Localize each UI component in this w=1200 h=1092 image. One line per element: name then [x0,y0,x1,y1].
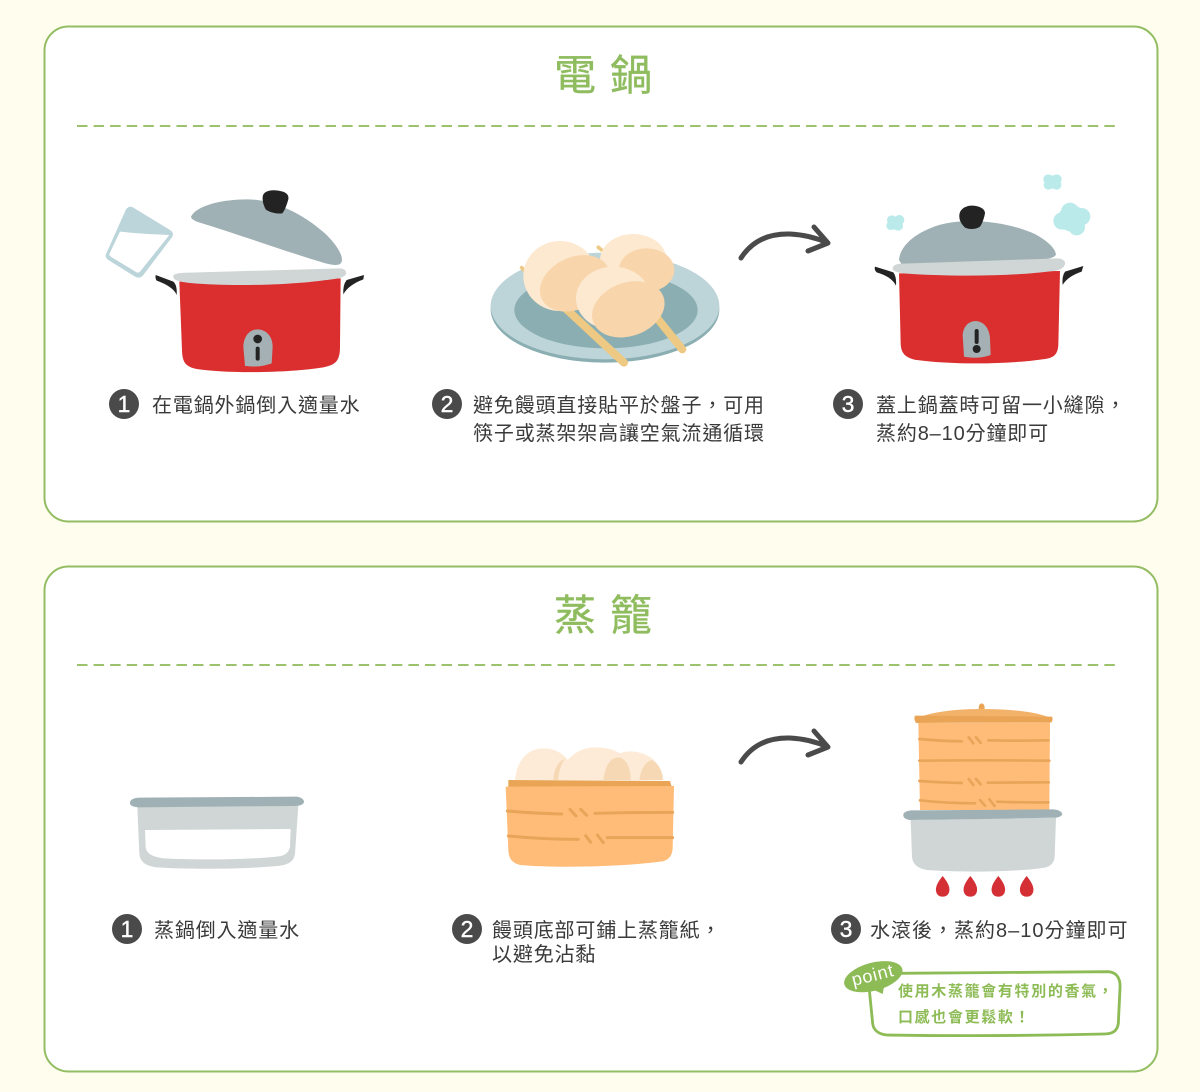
icon: bamboo steamer with buns [506,747,674,867]
step 2 text [432,389,765,445]
panel: 電鍋 [44,26,1158,522]
step 2 text: 以避免沾黏 [492,943,596,966]
step 3 text: 3 [842,391,854,417]
step 2 text: 避免饅頭直接貼平於盤子，可用 [473,394,765,417]
icon: buns on plate with chopsticks [491,234,719,363]
step 3 text [831,914,1128,944]
icon: rice cooker with open lid and water glass [106,190,364,372]
step 3 text [833,389,1126,445]
callout: point: 使用木蒸籠會有特別的香氣， [898,982,1114,1000]
step 2 text: 2 [441,391,453,417]
arrow [741,731,828,762]
step 2 text: 筷子或蒸架架高讓空氣流通循環 [473,422,765,445]
step 1 text [112,914,300,944]
panel: 蒸籠 [44,566,1158,1072]
step 1 text: 蒸鍋倒入適量水 [154,919,300,942]
step 1 text: 在電鍋外鍋倒入適量水 [152,394,360,417]
step 3 text: 3 [840,916,852,942]
step 1 text [109,389,360,419]
heading: 電鍋: 電鍋 [554,52,652,99]
arrow [741,227,828,258]
icon: rice cooker with lid closed and steam [875,174,1090,363]
icon: steamer pot with water [130,797,304,869]
step 3 text: 蓋上鍋蓋時可留一小縫隙， [876,394,1126,417]
heading: 蒸籠: 蒸籠 [554,592,652,639]
callout: point: 口感也會更鬆軟！ [898,1008,1031,1026]
icon: stacked steamer on pot over flames [903,703,1062,897]
step 3 text: 水滾後，蒸約8–10分鐘即可 [870,919,1128,942]
step 2 text: 2 [461,916,473,942]
step 1 text: 1 [118,391,130,417]
callout: point [841,955,1120,1036]
step 1 text: 1 [121,916,133,942]
step 2 text: 饅頭底部可鋪上蒸籠紙， [492,919,721,942]
step 3 text: 蒸約8–10分鐘即可 [876,422,1049,445]
step 2 text [452,914,721,966]
callout: point: point [849,960,896,990]
